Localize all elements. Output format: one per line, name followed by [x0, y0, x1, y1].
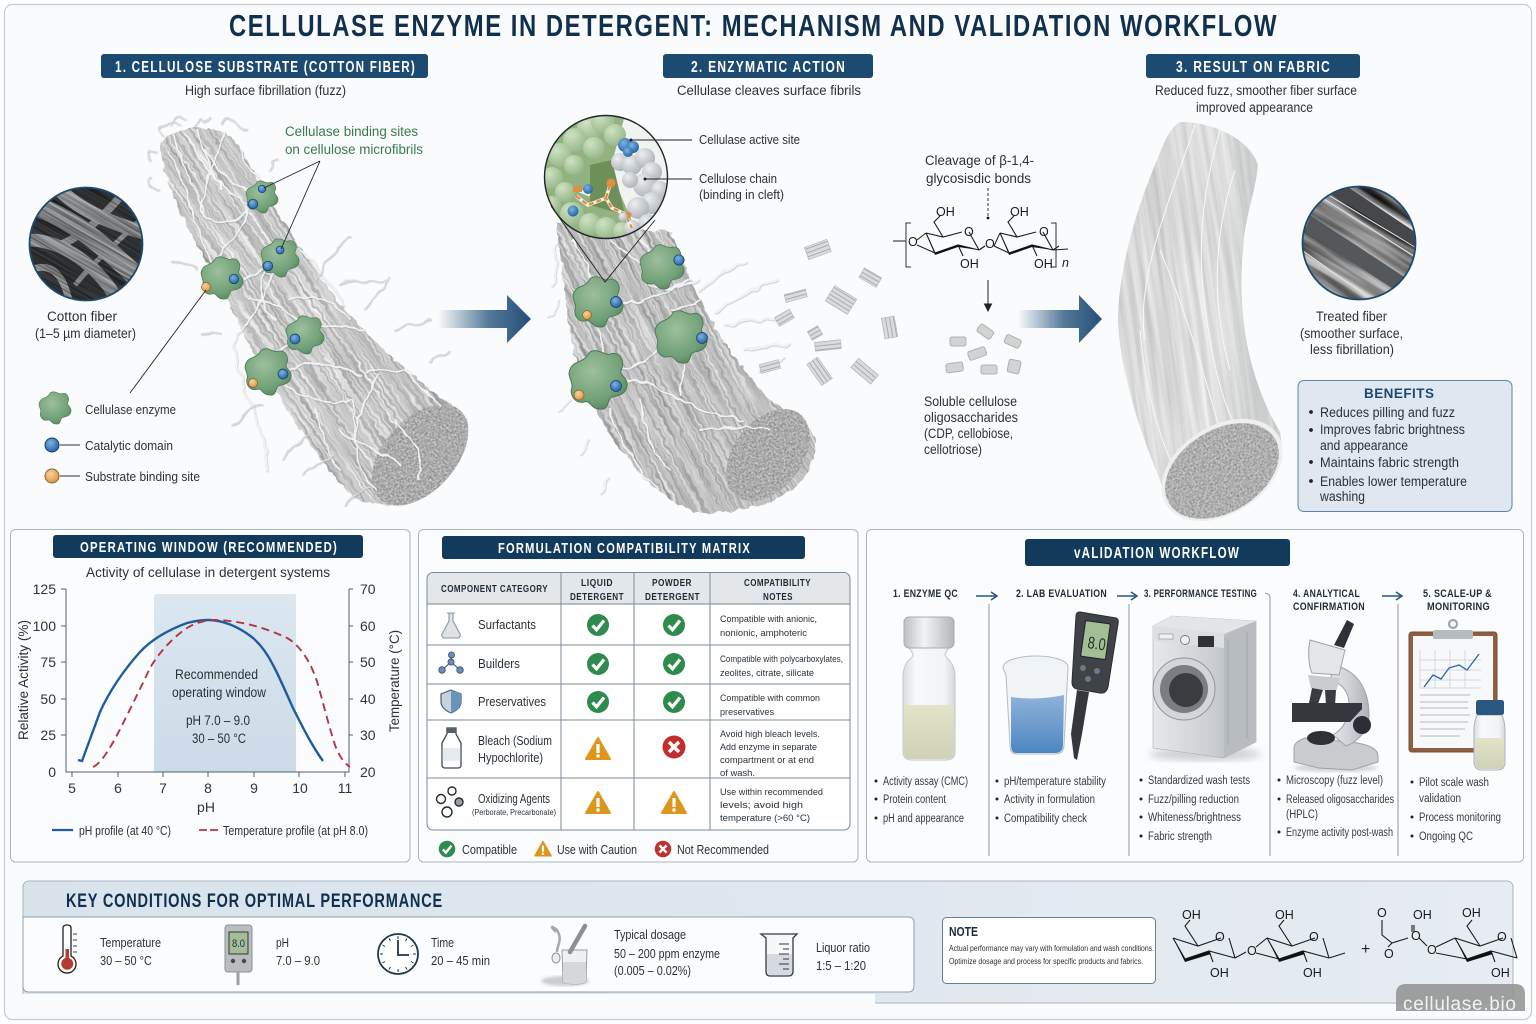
- row: preservatives: Compatible with common: [720, 693, 820, 704]
- window label: pH 7.0 – 9.0: [186, 713, 250, 728]
- step: performance testing: 3. PERFORMANCE TESTING: [1144, 588, 1257, 600]
- chemical structure: cellulose chain: n: [1062, 256, 1069, 270]
- legend: enzyme parts: Catalytic domain: [85, 439, 173, 453]
- table header: [441, 577, 811, 603]
- caption: treated fiber: less fibrillation): [1310, 342, 1394, 357]
- panel: benefits: and appearance: [1320, 438, 1408, 453]
- condition: time: Time: [431, 936, 454, 950]
- panel: key conditions band: [14, 881, 1517, 1008]
- row: preservatives: Preservatives: [478, 695, 546, 709]
- row: bleach: Hypochlorite): [478, 751, 543, 765]
- axis labels: Relative Activity (%): [16, 620, 31, 740]
- condition: liquor ratio: Liquor ratio: [816, 941, 870, 955]
- step: performance testing: Fuzz/pilling reduction: [1148, 794, 1239, 806]
- chemical structure: cellulose chain: OH: [1034, 257, 1053, 271]
- step: analytical confirmation: Enzyme activity post-wash: [1286, 827, 1393, 839]
- chemical structures: cellobiose and product: O: [1377, 906, 1387, 920]
- legend: compatibility: [439, 841, 769, 857]
- caption: cotton fiber: (1–5 µm diameter): [35, 326, 136, 341]
- window label: operating window: [172, 685, 266, 700]
- table header: DETERGENT: [570, 591, 624, 603]
- callout: binding sites: [130, 124, 423, 393]
- label: cleavage of bonds: [925, 153, 1034, 219]
- axis labels: 50: [360, 654, 376, 670]
- chemical structures: cellobiose and product: O: [1384, 947, 1394, 961]
- row: surfactants: [442, 613, 817, 639]
- condition: pH: 8.0: [232, 938, 245, 950]
- condition: dosage: (0.005 – 0.02%): [614, 964, 691, 978]
- chemical structures: cellobiose and product: +: [1361, 941, 1370, 958]
- callout: active site labels: [630, 133, 800, 202]
- row: builders: [439, 652, 843, 679]
- table header: NOTES: [763, 591, 793, 603]
- row: surfactants: Compatible with anionic,: [720, 614, 817, 625]
- callout: note: Optimize dosage and process for specific products and fabrics.: [949, 956, 1143, 966]
- chart: activity profile: [16, 581, 402, 815]
- condition: temperature: 30 – 50 °C: [100, 954, 152, 968]
- chemical structure: cellulose chain: O: [1039, 225, 1049, 239]
- chemical structures: cellobiose and product: O: [1215, 930, 1225, 944]
- heading: step 1: [101, 54, 428, 78]
- axis labels: 8: [204, 780, 212, 796]
- illustration: fuzzy cotton fiber: [147, 116, 468, 508]
- icon: microscope: [1292, 620, 1378, 772]
- condition: temperature: Temperature: [100, 936, 161, 950]
- step: enzyme QC: 1. ENZYME QC: [893, 588, 958, 600]
- chemical structures: cellobiose and product: OH: [1210, 966, 1229, 980]
- step: enzyme QC: pH and appearance: [883, 813, 964, 825]
- axis labels: 100: [33, 618, 56, 634]
- chemical structures: cellobiose and product: OH: [1413, 908, 1432, 922]
- panel: benefits: BENEFITS: [1364, 386, 1434, 401]
- subheading: step 3: Reduced fuzz, smoother fiber surface: [1155, 83, 1357, 98]
- step: lab evaluation: Activity in formulation: [1004, 794, 1095, 806]
- row: bleach: of wash.: [720, 768, 755, 779]
- enzymes on fiber: [201, 181, 324, 395]
- subheading: step 3: [1155, 83, 1357, 115]
- heading: step 3: 3. RESULT ON FABRIC: [1176, 59, 1331, 76]
- axis labels: [16, 581, 402, 815]
- axis labels: 70: [360, 581, 376, 597]
- icon: beaker and pH meter: [1003, 612, 1118, 760]
- heading: step 2: [663, 54, 873, 78]
- icon: washing machine: [1149, 616, 1261, 761]
- axis labels: 30: [360, 727, 376, 743]
- row: builders: zeolites, citrate, silicate: [720, 668, 814, 679]
- step: analytical confirmation: Released oligosaccharides: [1286, 794, 1394, 806]
- caption: oligosaccharides: cellotriose): [924, 442, 982, 457]
- chemical structure: cellulose chain: O: [985, 237, 995, 251]
- chemical structures: cellobiose and product: OH: [1491, 966, 1510, 980]
- icon: active site magnifier: [541, 110, 673, 282]
- caption: treated fiber: [1300, 309, 1403, 357]
- legend: compatibility: Not Recommended: [677, 843, 769, 857]
- illustration: smooth treated fiber: [1118, 122, 1282, 521]
- chemical structures: cellobiose and product: O: [1497, 930, 1507, 944]
- heading: workflow: vALIDATION WORKFLOW: [1074, 545, 1240, 562]
- row: builders: Builders: [478, 657, 520, 671]
- axis labels: 20: [360, 764, 376, 780]
- axis labels: 9: [250, 780, 258, 796]
- chemical structure: cellulose chain: OH: [960, 257, 979, 271]
- icon: beaker and pH meter: 8.0: [1086, 633, 1107, 654]
- step: enzyme QC: Protein content: [883, 794, 947, 806]
- arrow: step 1 to step 2: [438, 295, 531, 343]
- step: lab evaluation: Compatibility check: [1004, 813, 1087, 825]
- fragments: released microfibril pieces: [759, 239, 898, 386]
- step: scale-up and monitoring: 5. SCALE-UP &: [1423, 588, 1492, 600]
- chemical structures: cellobiose and product: [1173, 906, 1517, 980]
- row: surfactants: nonionic, amphoteric: [720, 628, 807, 639]
- panel: step 1 cellulose substrate: [28, 54, 468, 508]
- chemical structures: cellobiose and product: O: [1427, 943, 1437, 957]
- label: cleavage of bonds: Cleavage of β-1,4-: [925, 153, 1034, 168]
- condition: pH: [225, 925, 320, 985]
- step: lab evaluation: [996, 588, 1118, 825]
- legend: chart lines: pH profile (at 40 °C): [79, 824, 171, 838]
- heading: operating window: OPERATING WINDOW (RECOMMENDED): [80, 540, 338, 556]
- row: oxidizing agents: Use within recommended: [720, 787, 823, 798]
- oligosaccharide pieces: [946, 323, 1022, 374]
- caption: treated fiber: (smoother surface,: [1300, 326, 1403, 341]
- step: lab evaluation: 2. LAB EVALUATION: [1016, 588, 1107, 600]
- chemical structures: cellobiose and product: OH: [1182, 908, 1201, 922]
- legend: enzyme parts: [39, 392, 200, 484]
- heading: step 1: 1. CELLULOSE SUBSTRATE (COTTON FIBER): [115, 59, 416, 76]
- step: analytical confirmation: 4. ANALYTICAL: [1293, 588, 1360, 600]
- panel: step 2 enzymatic action: [544, 54, 1068, 514]
- legend: enzyme parts: Cellulase enzyme: [85, 403, 176, 417]
- axis labels: 0: [48, 764, 56, 780]
- heading: workflow: [1025, 539, 1290, 566]
- row: oxidizing agents: (Perborate, Precarbonate): [472, 807, 556, 817]
- arrow: hydrolysis down: [984, 280, 992, 311]
- callout: binding sites: on cellulose microfibrils: [285, 142, 423, 157]
- callout: binding sites: Cellulase binding sites: [285, 124, 418, 139]
- step: analytical confirmation: [1278, 588, 1394, 839]
- callout: note: NOTE: [949, 925, 978, 939]
- axis labels: 10: [292, 780, 308, 796]
- window label: [172, 667, 266, 746]
- legend: compatibility: Compatible: [462, 843, 517, 857]
- step: performance testing: [1140, 588, 1261, 843]
- condition: temperature: [58, 925, 161, 973]
- caption: oligosaccharides: [924, 394, 1018, 457]
- chemical structure: cellulose chain: O: [908, 235, 918, 249]
- enzymes on fiber: [569, 245, 708, 409]
- chemical structure: cellulose chain: [893, 205, 1069, 271]
- subheading: step 3: improved appearance: [1196, 100, 1313, 115]
- chemical structure: cellulose chain: OH: [1010, 205, 1029, 219]
- condition: pH: 7.0 – 9.0: [276, 954, 320, 968]
- table header: DETERGENT: [645, 591, 700, 603]
- row: bleach: compartment or at end: [720, 755, 814, 766]
- subheading: step 1: High surface fibrillation (fuzz): [185, 83, 346, 98]
- step: analytical confirmation: (HPLC): [1286, 809, 1318, 821]
- table header: COMPATIBILITY: [744, 577, 811, 589]
- row: bleach: [442, 728, 820, 779]
- subheading: step 2: Cellulase cleaves surface fibrils: [677, 83, 861, 98]
- legend: compatibility: Use with Caution: [557, 843, 637, 857]
- axis labels: 6: [114, 780, 122, 796]
- step: scale-up and monitoring: [1409, 588, 1505, 843]
- row: oxidizing agents: temperature (>60 °C): [720, 813, 810, 824]
- heading: matrix: [442, 536, 805, 559]
- panel: benefits: washing: [1319, 489, 1365, 504]
- watermark: cellulase.bio: [1403, 994, 1516, 1015]
- step: scale-up and monitoring: Process monitoring: [1419, 812, 1501, 824]
- axis labels: Temperature (°C): [387, 630, 402, 732]
- conditions strip: [23, 917, 914, 992]
- icon: vial: [903, 617, 955, 760]
- chemical structures: cellobiose and product: O: [1411, 929, 1421, 943]
- panel: operating window: [10, 530, 410, 862]
- callout: note: Actual performance may vary with formulation and wash conditions.: [949, 943, 1154, 953]
- chemical structures: cellobiose and product: O: [1247, 944, 1257, 958]
- step: scale-up and monitoring: Pilot scale wash: [1419, 777, 1489, 789]
- panel: benefits: Improves fabric brightness: [1320, 422, 1465, 437]
- caption: oligosaccharides: oligosaccharides: [924, 410, 1018, 425]
- caption: treated fiber: Treated fiber: [1316, 309, 1387, 324]
- callout: active site labels: (binding in cleft): [699, 188, 784, 202]
- row: bleach: Bleach (Sodium: [478, 734, 552, 748]
- condition: dosage: 50 – 200 ppm enzyme: [614, 947, 720, 961]
- panel: benefits: Reduces pilling and fuzz: [1320, 405, 1455, 420]
- legend: chart lines: [52, 824, 368, 838]
- icon: clipboard and sample vial: [1409, 620, 1505, 770]
- table header: LIQUID: [581, 577, 613, 589]
- chemical structures: cellobiose and product: O: [1309, 930, 1319, 944]
- condition: liquor ratio: [761, 934, 870, 976]
- axis labels: 125: [33, 581, 56, 597]
- legend: chart lines: Temperature profile (at pH 8.0): [223, 824, 368, 838]
- row: bleach: Add enzyme in separate: [720, 742, 817, 753]
- panel: step 3 result on fabric: [1002, 54, 1512, 552]
- step: analytical confirmation: CONFIRMATION: [1293, 601, 1365, 613]
- condition: pH: pH: [276, 936, 289, 950]
- step: enzyme QC: Activity assay (CMC): [883, 776, 968, 788]
- row: oxidizing agents: Oxidizing Agents: [478, 792, 550, 806]
- chemical structures: cellobiose and product: OH: [1275, 908, 1294, 922]
- axis labels: 11: [338, 780, 352, 796]
- condition: dosage: [541, 926, 720, 986]
- micrograph: cotton fiber: [28, 186, 144, 302]
- panel: benefits: Enables lower temperature: [1320, 474, 1467, 489]
- panel: benefits: [1298, 380, 1512, 512]
- panel: benefits: Maintains fabric strength: [1320, 455, 1459, 470]
- table: [427, 572, 850, 830]
- row: preservatives: preservatives: [720, 707, 774, 718]
- chemical structures: cellobiose and product: OH: [1462, 906, 1481, 920]
- heading: step 2: 2. ENZYMATIC ACTION: [691, 59, 846, 76]
- row: oxidizing agents: levels; avoid high: [720, 800, 803, 811]
- heading: matrix: FORMULATION COMPATIBILITY MATRIX: [498, 541, 751, 557]
- step: performance testing: Whiteness/brightness: [1148, 812, 1241, 824]
- row: preservatives: [441, 690, 820, 718]
- axis labels: 50: [40, 691, 56, 707]
- table header: COMPONENT CATEGORY: [441, 583, 548, 595]
- arrow: step 2 to step 3: [1018, 295, 1102, 343]
- step: scale-up and monitoring: Ongoing QC: [1419, 831, 1473, 843]
- row: builders: Compatible with polycarboxylates,: [720, 654, 843, 665]
- chemical structures: cellobiose and product: OH: [1303, 966, 1322, 980]
- heading: step 3: [1146, 54, 1360, 78]
- step: scale-up and monitoring: validation: [1419, 793, 1461, 805]
- table header: POWDER: [652, 577, 692, 589]
- step: performance testing: Standardized wash tests: [1148, 775, 1250, 787]
- chemical structure: cellulose chain: O: [964, 225, 974, 239]
- step: lab evaluation: pH/temperature stability: [1004, 776, 1106, 788]
- condition: liquor ratio: 1:5 – 1:20: [816, 959, 866, 973]
- dividers and arrows: [976, 592, 1402, 856]
- step: performance testing: Fabric strength: [1148, 831, 1212, 843]
- condition: time: [378, 934, 490, 974]
- illustration: fiber under attack: [547, 222, 817, 514]
- panel: validation workflow: [866, 530, 1524, 862]
- heading: key conditions: KEY CONDITIONS FOR OPTIMAL PERFORMANCE: [66, 891, 443, 912]
- callout: active site labels: Cellulose chain: [699, 172, 777, 186]
- axis labels: 7: [159, 780, 167, 796]
- caption: oligosaccharides: (CDP, cellobiose,: [924, 426, 1013, 441]
- row: oxidizing agents: [436, 787, 823, 824]
- step: enzyme QC: [874, 588, 968, 825]
- callout: active site labels: Cellulase active site: [699, 133, 800, 147]
- caption: cotton fiber: Cotton fiber: [47, 309, 117, 324]
- label: cleavage of bonds: glycosisdic bonds: [926, 171, 1031, 186]
- axis labels: 60: [360, 618, 376, 634]
- caption: oligosaccharides: Soluble cellulose: [924, 394, 1017, 409]
- window label: Recommended: [175, 667, 258, 682]
- heading: operating window: [53, 535, 363, 558]
- chemical structure: cellulose chain: OH: [936, 205, 955, 219]
- step: analytical confirmation: Microscopy (fuzz level): [1286, 775, 1383, 787]
- subheading: activity: Activity of cellulase in detergent systems: [86, 565, 330, 580]
- window label: 30 – 50 °C: [192, 731, 246, 746]
- callout: note: [942, 918, 1156, 984]
- axis labels: 40: [360, 691, 376, 707]
- panel: compatibility matrix: [418, 530, 858, 862]
- axis labels: pH: [197, 799, 215, 815]
- watermark: [1396, 984, 1525, 1015]
- condition: time: 20 – 45 min: [431, 954, 490, 968]
- axis labels: 5: [68, 780, 76, 796]
- caption: cotton fiber: [35, 309, 136, 341]
- row: bleach: Avoid high bleach levels.: [720, 729, 820, 740]
- axis labels: 25: [40, 727, 56, 743]
- condition: dosage: Typical dosage: [614, 928, 686, 942]
- step: scale-up and monitoring: MONITORING: [1427, 601, 1490, 613]
- legend: enzyme parts: Substrate binding site: [85, 470, 200, 484]
- micrograph: treated fiber: [1302, 186, 1416, 300]
- row: surfactants: Surfactants: [478, 618, 536, 632]
- axis labels: 75: [40, 654, 56, 670]
